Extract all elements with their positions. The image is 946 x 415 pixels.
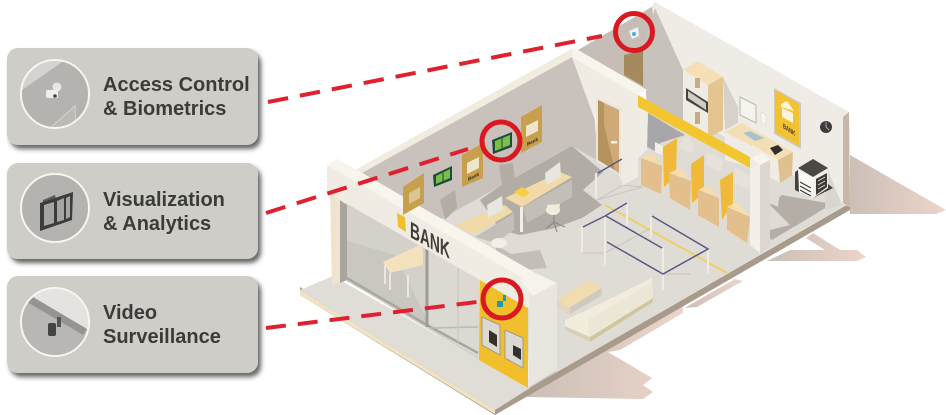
icon: surveillance camera <box>20 287 90 357</box>
camera: top <box>629 27 639 39</box>
left column <box>330 192 347 285</box>
panel: video surveillance <box>7 276 258 373</box>
camera: ATM <box>497 295 506 307</box>
cabinet <box>683 61 723 138</box>
carpet and desk shadow <box>480 146 603 235</box>
yellow poster: BANK <box>783 122 796 139</box>
panel: access control <box>7 48 258 145</box>
interior floor <box>395 100 846 372</box>
ATM 1 <box>482 317 500 355</box>
wall posters: Bank <box>527 136 538 148</box>
office desks <box>440 162 572 248</box>
queue barriers <box>582 158 708 290</box>
pillar <box>750 153 770 253</box>
right wall <box>643 2 850 210</box>
callout circle: video <box>483 280 521 318</box>
dashed line: video <box>266 302 477 328</box>
ATM 2 <box>505 330 523 368</box>
callout circle: access <box>616 14 652 50</box>
label: access control: & Biometrics <box>103 98 226 120</box>
front pillar <box>520 272 557 388</box>
cream strip beside recess <box>638 100 648 158</box>
back desk <box>725 123 793 183</box>
glass storefront <box>345 200 480 360</box>
floor shadow near right wall <box>762 195 832 240</box>
upper room back wall <box>578 5 662 100</box>
dashed line: analytics <box>266 149 468 213</box>
label: video surveillance: Surveillance <box>103 326 221 348</box>
partition wall <box>572 48 647 185</box>
label: access control: Access Control <box>103 74 250 96</box>
wall posters <box>403 105 542 215</box>
floor shadow patch <box>495 245 547 270</box>
callout circle: analytics <box>482 122 520 160</box>
wall posters: Bank <box>468 171 479 183</box>
yellow beam <box>638 95 750 168</box>
back left wall <box>355 48 597 242</box>
label: visualization: & Analytics <box>103 213 211 235</box>
right side chair <box>770 185 780 207</box>
icon: access camera <box>20 60 89 132</box>
shaded recess under beam <box>647 113 685 152</box>
sofa <box>565 278 653 342</box>
header band <box>327 159 544 309</box>
queue floor line <box>605 205 727 273</box>
door lower <box>596 97 621 176</box>
building base slab <box>300 203 850 415</box>
door upper room <box>624 50 643 86</box>
bank logo: BANK <box>410 217 450 265</box>
panel: visualization <box>7 163 258 259</box>
bank logo <box>397 213 450 265</box>
chairs behind counters <box>655 134 751 190</box>
label: video surveillance: Video <box>103 302 157 324</box>
printer <box>795 159 833 198</box>
wall frame <box>740 97 756 123</box>
yellow poster <box>774 88 801 149</box>
label: visualization: Visualization <box>103 189 225 211</box>
green display boards <box>433 132 512 187</box>
ground shadows <box>527 155 946 399</box>
light switch <box>761 112 766 125</box>
counters <box>641 138 750 243</box>
icon: analytics board <box>21 174 89 242</box>
coffee table <box>557 280 602 315</box>
dashed line: access <box>268 36 602 102</box>
yellow ATM panel <box>479 280 528 388</box>
clock <box>820 121 832 133</box>
